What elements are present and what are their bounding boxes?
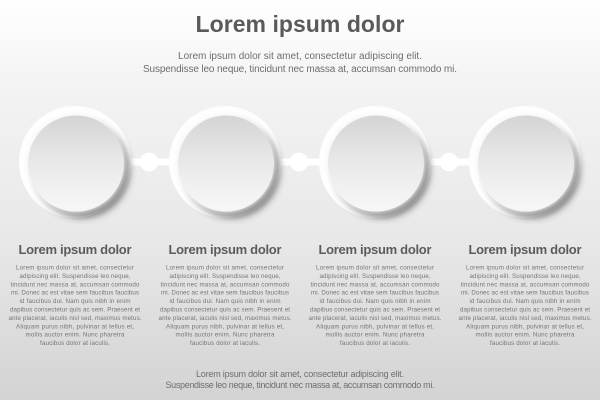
column 3 body: tincidunt nec massa at, accumsan commodo <box>310 281 440 288</box>
column 1 body: faucibus dolor at iaculis. <box>40 340 110 347</box>
column 2 body: faucibus dolor at iaculis. <box>190 340 260 347</box>
column 3 body: ante placerat, iaculis nisl sed, maximus metus. <box>308 315 442 322</box>
footer text <box>166 369 434 390</box>
column 3 body: adipiscing elit. Suspendisse leo neque, <box>320 273 431 280</box>
column 2 body: id faucibus dui. Nam quis nibh in enim <box>170 298 280 305</box>
column 1 body: dapibus consectetur quis ac sem. Praesent et <box>10 306 140 314</box>
circle 1 <box>19 106 131 218</box>
column 1 body <box>8 264 142 347</box>
title: Lorem ipsum dolor <box>196 11 405 37</box>
column 2 body <box>158 264 292 347</box>
column 1 body: id faucibus dui. Nam quis nibh in enim <box>20 298 130 305</box>
column 4 text <box>458 242 592 347</box>
column 1 body: Aliquam purus nibh, pulvinar at tellus et, <box>16 323 134 330</box>
column 3 body: Lorem ipsum dolor sit amet, consectetur <box>316 264 434 272</box>
column 2 body: ante placerat, iaculis nisl sed, maximus metus. <box>158 315 292 322</box>
column 4 heading: Lorem ipsum dolor <box>468 242 582 257</box>
column 4 body: adipiscing elit. Suspendisse leo neque, <box>470 273 581 280</box>
intro text: Lorem ipsum dolor sit amet, consectetur adipiscing elit. <box>178 51 422 62</box>
column 3 text <box>308 242 442 347</box>
column 3 heading: Lorem ipsum dolor <box>318 242 432 257</box>
circle 2 <box>169 106 281 218</box>
column 1 body: ante placerat, iaculis nisl sed, maximus metus. <box>8 315 142 322</box>
column 4 body: Aliquam purus nibh, pulvinar at tellus et, <box>466 323 584 330</box>
column 3 body: mi. Donec ac est vitae sem faucibus faucibus <box>311 290 439 297</box>
circle 4 <box>469 106 581 218</box>
column 2 body: Aliquam purus nibh, pulvinar at tellus et, <box>166 323 284 330</box>
footer text: Lorem ipsum dolor sit amet, consectetur adipiscing elit. <box>196 369 404 379</box>
column 2 body: dapibus consectetur quis ac sem. Praesent et <box>160 306 290 314</box>
column 1 body: tincidunt nec massa at, accumsan commodo <box>10 281 140 288</box>
column 2 body: tincidunt nec massa at, accumsan commodo <box>160 281 290 288</box>
column 3 body: Aliquam purus nibh, pulvinar at tellus et, <box>316 323 434 330</box>
column 1 text <box>8 242 142 347</box>
column 4 body: mi. Donec ac est vitae sem faucibus faucibus <box>461 290 589 297</box>
intro text <box>143 51 457 75</box>
column 3 body: faucibus dolor at iaculis. <box>340 340 410 347</box>
column 4 body: dapibus consectetur quis ac sem. Praesent et <box>460 306 590 314</box>
column 1 body: mi. Donec ac est vitae sem faucibus faucibus <box>11 290 139 297</box>
column 4 body: id faucibus dui. Nam quis nibh in enim <box>470 298 580 305</box>
connector 1 <box>128 153 172 171</box>
column 2 body: Lorem ipsum dolor sit amet, consectetur <box>166 264 284 272</box>
column 1 body: Lorem ipsum dolor sit amet, consectetur <box>16 264 134 272</box>
column 2 body: mi. Donec ac est vitae sem faucibus faucibus <box>161 290 289 297</box>
column 3 body: id faucibus dui. Nam quis nibh in enim <box>320 298 430 305</box>
column 4 body: Lorem ipsum dolor sit amet, consectetur <box>466 264 584 272</box>
column 3 body: dapibus consectetur quis ac sem. Praesent et <box>310 306 440 314</box>
column 2 text <box>158 242 292 347</box>
column 3 body: mollis auctor enim. Nunc pharetra <box>326 332 425 339</box>
column 4 body: mollis auctor enim. Nunc pharetra <box>476 332 575 339</box>
circle 3 <box>319 106 431 218</box>
intro text: Suspendisse leo neque, tincidunt nec massa at, accumsan commodo mi. <box>143 64 457 75</box>
footer text: Suspendisse leo neque, tincidunt nec massa at, accumsan commodo mi. <box>166 380 434 390</box>
column 2 body: adipiscing elit. Suspendisse leo neque, <box>170 273 281 280</box>
column 4 body: tincidunt nec massa at, accumsan commodo <box>460 281 590 288</box>
column 1 body: adipiscing elit. Suspendisse leo neque, <box>20 273 131 280</box>
column 4 body: ante placerat, iaculis nisl sed, maximus metus. <box>458 315 592 322</box>
column 2 heading: Lorem ipsum dolor <box>168 242 282 257</box>
column 2 body: mollis auctor enim. Nunc pharetra <box>176 332 275 339</box>
column 4 body: faucibus dolor at iaculis. <box>490 340 560 347</box>
column 4 body <box>458 264 592 347</box>
column 1 heading: Lorem ipsum dolor <box>18 242 132 257</box>
column 1 body: mollis auctor enim. Nunc pharetra <box>26 332 125 339</box>
connector 3 <box>428 153 472 171</box>
connector 2 <box>278 153 322 171</box>
column 3 body <box>308 264 442 347</box>
